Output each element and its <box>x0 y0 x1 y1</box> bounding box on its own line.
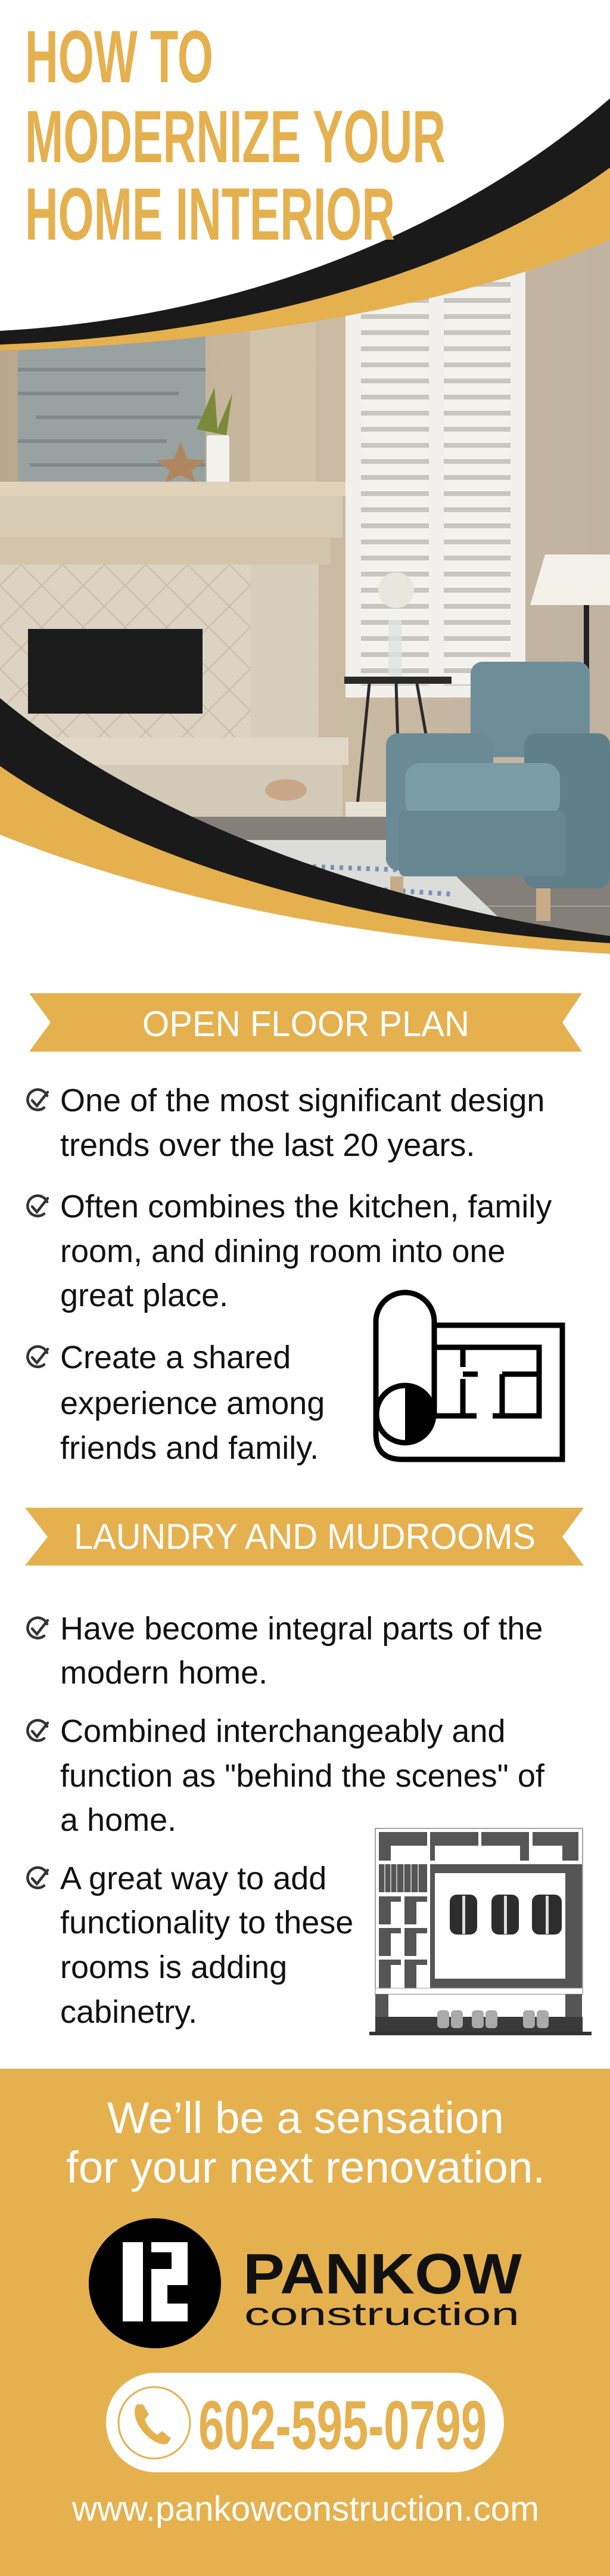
window shutters <box>346 227 525 698</box>
illustration: mudroom cabinet <box>369 1828 592 2035</box>
bullet 3: cabinetry. <box>60 1994 197 2030</box>
bullet 1: modern home. <box>60 1655 267 1691</box>
bottom curve: gold band <box>0 766 610 966</box>
bullet 2: function as "behind the scenes" of <box>60 1758 545 1794</box>
icon: floor plan scroll <box>376 1292 562 1459</box>
star <box>156 441 206 483</box>
logo <box>89 2218 522 2348</box>
bullet 2 <box>27 1189 552 1313</box>
bottom curve: black band <box>0 698 610 966</box>
banner: open floor plan: OPEN FLOOR PLAN <box>142 1004 469 1044</box>
phone pill <box>106 2373 504 2472</box>
bullet 2: Combined interchangeably and <box>60 1713 506 1749</box>
bullet 3: rooms is adding <box>60 1949 287 1985</box>
title: HOW TO <box>25 16 213 98</box>
bullet 2: a home. <box>60 1802 176 1838</box>
logo: PANKOW <box>243 2242 522 2306</box>
bullet 3 <box>27 1340 325 1466</box>
bullet 1 <box>27 1083 544 1163</box>
floor <box>0 802 610 960</box>
footer panel <box>0 2069 610 2576</box>
bullet 3: functionality to these <box>60 1905 353 1940</box>
bullet 2 <box>27 1713 545 1838</box>
bullet 3: friends and family. <box>60 1430 319 1466</box>
top white area <box>0 0 610 331</box>
bullet 1: Have become integral parts of the <box>60 1611 543 1647</box>
lamp <box>530 554 610 671</box>
banner: laundry and mudrooms: LAUNDRY AND MUDROOMS <box>74 1517 536 1557</box>
bullet 3: A great way to add <box>60 1861 326 1896</box>
top curve: black band <box>0 0 610 345</box>
armchair <box>386 662 610 921</box>
website: www.pankowconstruction.com <box>71 2490 539 2528</box>
mantel <box>0 482 348 817</box>
logo: construction <box>244 2296 519 2332</box>
plant and vase <box>197 388 232 483</box>
banner: laundry and mudrooms <box>25 1508 584 1566</box>
bullet 1 <box>27 1611 543 1691</box>
title: HOME INTERIOR <box>25 173 395 256</box>
tagline: We’ll be a sensation <box>107 2093 504 2143</box>
banner: open floor plan <box>29 993 582 1052</box>
side table <box>344 572 452 805</box>
bullet 1: trends over the last 20 years. <box>60 1127 475 1163</box>
title <box>25 16 446 256</box>
painting <box>18 334 206 483</box>
bullet 3 <box>27 1861 353 2030</box>
bullet 1: One of the most significant design <box>60 1083 544 1118</box>
bullets: laundry and mudrooms <box>27 1611 545 2030</box>
tagline: for your next renovation. <box>66 2143 545 2192</box>
bullet 3: experience among <box>60 1385 325 1421</box>
bullets: open floor plan <box>27 1083 552 1466</box>
bullet 2: room, and dining room into one <box>60 1233 505 1269</box>
bullet 2: Often combines the kitchen, family <box>60 1189 552 1225</box>
bullet 2: great place. <box>60 1278 228 1313</box>
bottom white <box>0 835 610 978</box>
photo: living room interior <box>0 95 610 960</box>
top curve: gold band <box>0 0 610 351</box>
rug <box>179 840 536 954</box>
tagline <box>66 2093 545 2192</box>
bullet 3: Create a shared <box>60 1340 291 1375</box>
